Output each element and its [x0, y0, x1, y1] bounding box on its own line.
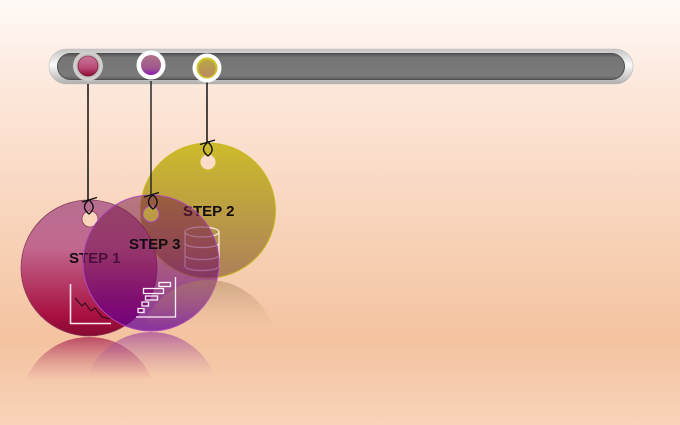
reflection: step 1 disc [21, 337, 157, 405]
icon: falling line chart [70, 284, 111, 324]
timeline marker: step 1 [73, 51, 103, 81]
panel: step 2 disc [140, 143, 276, 278]
heading: step 3: STEP 3 [129, 236, 180, 253]
timeline marker: step 3 [136, 50, 166, 80]
knot: step 2 [200, 140, 215, 156]
icon: gantt chart [136, 277, 176, 317]
reflection: step 3 disc [83, 332, 219, 400]
reflection: step 2 disc [140, 280, 276, 348]
heading: step 1: STEP 1 [69, 250, 120, 267]
strings [88, 81, 207, 201]
knot: step 1 [82, 198, 97, 214]
knot: step 3 [144, 192, 159, 209]
panel: step 3 disc [83, 195, 219, 331]
timeline marker: step 2 [192, 54, 222, 82]
heading: step 2: STEP 2 [183, 203, 234, 220]
timeline bar [49, 49, 633, 84]
icon: database [185, 227, 219, 270]
panel: step 1 disc [21, 200, 157, 336]
